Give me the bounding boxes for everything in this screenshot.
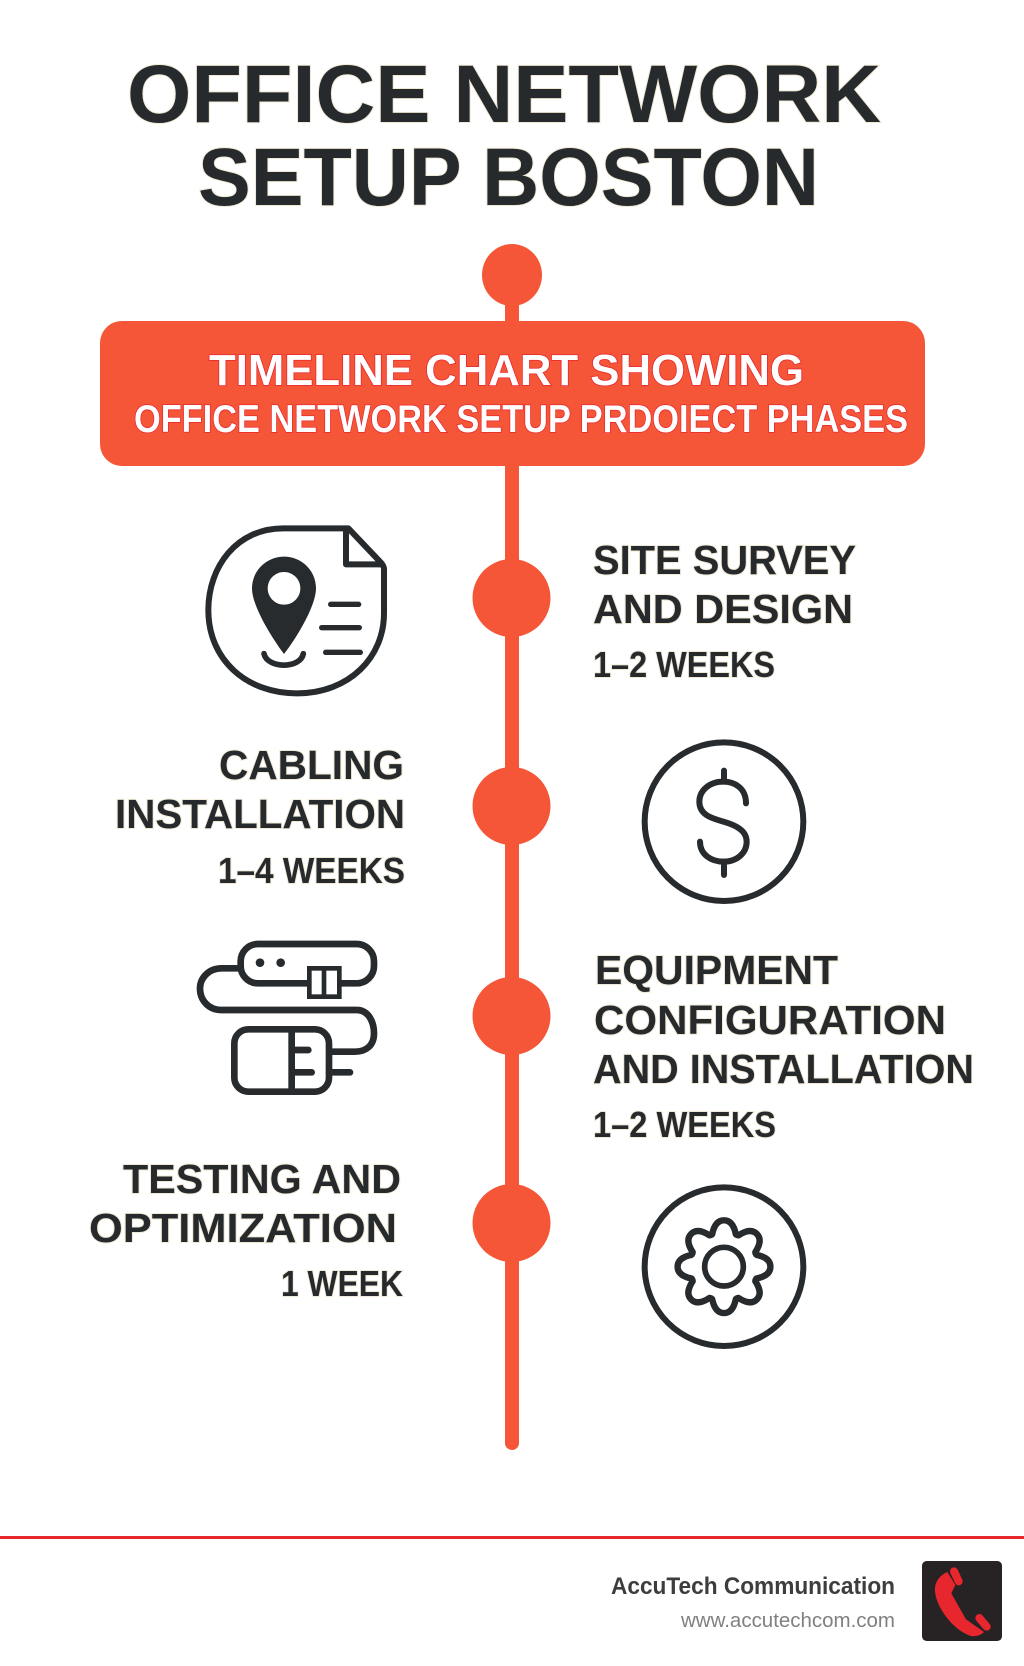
phase 3: equipment configuration and installation: EQUIPMENT <box>595 947 838 993</box>
icon: phone logo <box>922 1561 1002 1641</box>
banner: chart title <box>100 321 925 466</box>
phase 1: site survey and design: AND DESIGN <box>593 586 853 632</box>
phase 2: cabling installation: 1–4 WEEKS <box>218 850 405 891</box>
timeline node 3 <box>472 977 550 1055</box>
footer: company name and website <box>611 1573 895 1632</box>
phase 1: site survey and design <box>593 537 856 685</box>
phase 4: testing and optimization: 1 WEEK <box>281 1263 403 1304</box>
timeline node 2 <box>472 767 550 845</box>
phase 3: equipment configuration and installation: AND INSTALLATION <box>593 1046 974 1092</box>
phase 3: equipment configuration and installation <box>593 947 974 1145</box>
timeline node 4 <box>472 1184 550 1262</box>
banner: chart title: OFFICE NETWORK SETUP PRDOIECT PHASES <box>134 398 908 441</box>
phase 1: site survey and design: 1–2 WEEKS <box>593 644 775 685</box>
timeline spine <box>482 244 542 1450</box>
phase 2: cabling installation <box>115 742 405 891</box>
phase 2: cabling installation: INSTALLATION <box>115 791 405 837</box>
title <box>127 49 881 223</box>
phase 3: equipment configuration and installation: CONFIGURATION <box>594 997 946 1043</box>
phase 3: equipment configuration and installation: 1–2 WEEKS <box>593 1104 776 1145</box>
title: OFFICE NETWORK <box>127 49 881 140</box>
phase 4: testing and optimization <box>89 1156 403 1304</box>
icon: cable and devices <box>200 944 374 1092</box>
phase 1: site survey and design: SITE SURVEY <box>593 537 856 583</box>
phase 4: testing and optimization: TESTING AND <box>123 1156 401 1202</box>
title: SETUP BOSTON <box>198 132 819 223</box>
banner: chart title: TIMELINE CHART SHOWING <box>209 346 804 395</box>
timeline node 1 <box>472 559 550 637</box>
footer: company name and website: www.accutechcom.com <box>680 1610 895 1632</box>
icon: gear <box>645 1187 803 1346</box>
icon: location document <box>208 528 384 693</box>
icon: dollar <box>645 742 803 901</box>
phase 2: cabling installation: CABLING <box>219 742 404 788</box>
footer: company name and website: AccuTech Communication <box>611 1573 895 1600</box>
phase 4: testing and optimization: OPTIMIZATION <box>89 1205 397 1251</box>
